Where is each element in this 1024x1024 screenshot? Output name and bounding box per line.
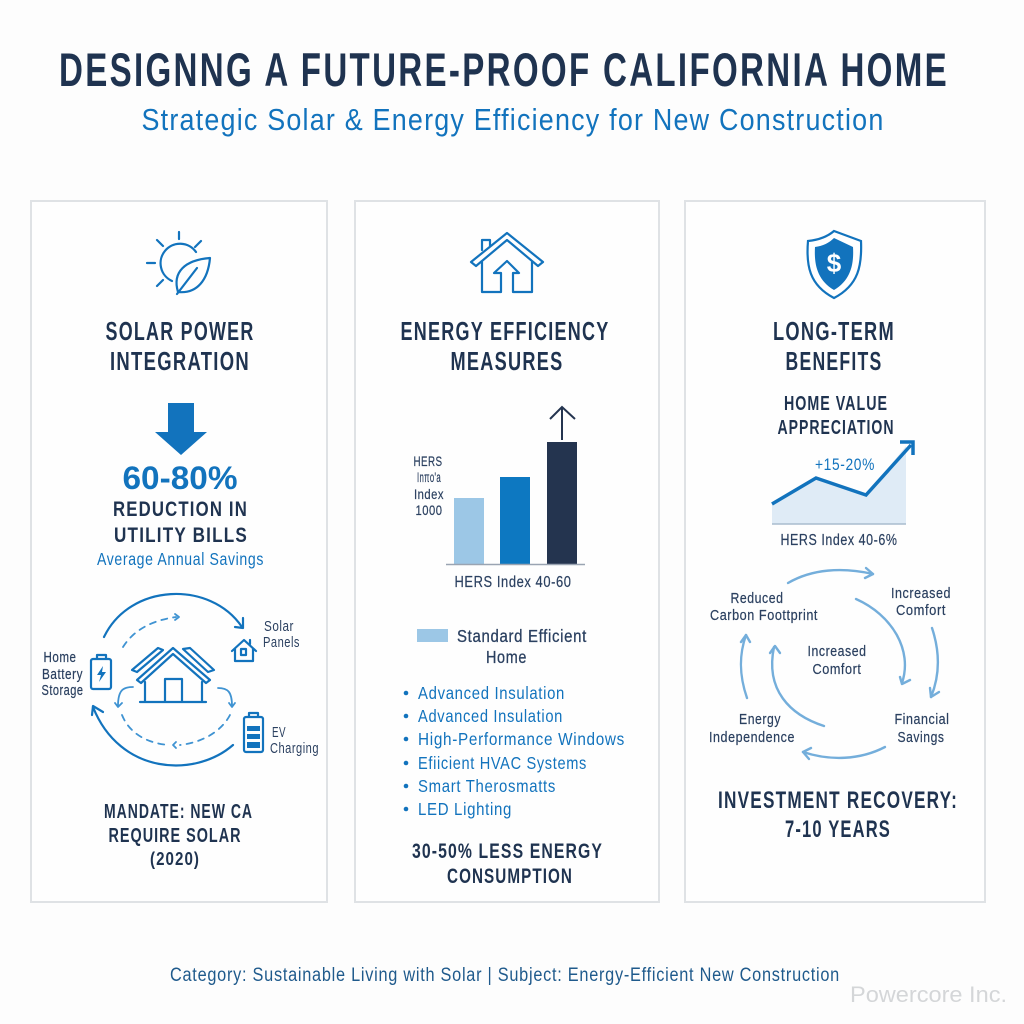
label: home battery storage: Storage: [42, 683, 84, 699]
panel: energy efficiency measures: [355, 201, 659, 902]
label: energy independence: [709, 711, 795, 746]
chart: value appreciation: [772, 442, 913, 524]
list: measures: Advanced Insulation: [418, 706, 563, 726]
text: average annual savings: Average Annual Savings: [97, 549, 264, 569]
heading: solar power integration: [106, 318, 254, 376]
stat: 60-80%: 60-80%: [122, 460, 238, 496]
label: EV charging: EV: [272, 725, 286, 741]
footer: Category: Sustainable Living with Solar | Subject: Energy-Efficient New Construction: [170, 965, 840, 986]
heading: long-term benefits: [773, 318, 895, 376]
label: energy independence: Independence: [709, 729, 795, 746]
icon: shield with dollar: $: [827, 248, 842, 278]
label: increased comfort (right): Comfort: [896, 602, 946, 619]
text: reduction in utility bills: [113, 498, 248, 547]
label: financial savings: Financial: [894, 711, 950, 728]
label: energy independence: Energy: [739, 711, 781, 728]
subheading: home value appreciation: HOME VALUE: [784, 393, 888, 415]
chart: HERS bars: [414, 407, 585, 591]
label: increased comfort (center): [808, 643, 866, 678]
label: reduced carbon footprint: Carbon Foottprint: [710, 607, 818, 624]
list: measures: LED Lighting: [418, 799, 512, 819]
heading: solar power integration: SOLAR POWER: [106, 318, 254, 346]
label: EV charging: Charging: [270, 741, 319, 757]
label: home battery storage: [42, 650, 84, 699]
list: measures: [404, 683, 625, 819]
text: mandate: MANDATE: NEW CA: [104, 801, 253, 823]
text: less energy consumption: CONSUMPTION: [447, 865, 573, 888]
label: home battery storage: Home: [44, 650, 76, 666]
text: mandate: REQUIRE SOLAR: [108, 825, 242, 847]
text: reduction in utility bills: UTILITY BILLS: [114, 524, 248, 547]
bar: light: [454, 498, 484, 564]
list: measures: Advanced Insulation: [418, 683, 565, 703]
arrows: outer and inner cycle: [741, 568, 939, 759]
label: +15-20%: +15-20%: [815, 455, 875, 474]
icon: sun and leaf: [147, 232, 210, 294]
axis label: Index: [414, 486, 444, 502]
list: measures: Efiicient HVAC Systems: [418, 753, 587, 773]
label: solar panels: Panels: [263, 635, 300, 651]
heading: solar power integration: INTEGRATION: [110, 348, 250, 376]
heading: long-term benefits: BENEFITS: [786, 348, 882, 376]
text: mandate: [104, 801, 253, 869]
icon: down arrow: [155, 403, 207, 455]
text: less energy consumption: 30-50% LESS ENERGY: [412, 840, 603, 863]
label: increased comfort (right): [891, 585, 951, 619]
icon: house: [471, 233, 543, 292]
icon: small house: [232, 640, 256, 661]
bar: medium: [500, 477, 530, 564]
axis label: HERS: [414, 453, 442, 469]
icon: house with solar roof: [132, 648, 214, 702]
panel: long-term benefits: [685, 201, 985, 902]
label: increased comfort (right): Increased: [891, 585, 951, 602]
legend: standard efficient home: [417, 626, 587, 667]
label: increased comfort (center): Increased: [808, 643, 866, 660]
subheading: home value appreciation: APPRECIATION: [778, 417, 894, 439]
bar: dark: [547, 442, 577, 564]
heading: long-term benefits: LONG-TERM: [773, 318, 895, 346]
arrow: up: [550, 407, 575, 440]
axis label: 1000: [416, 502, 442, 518]
arrows: energy loop: [92, 594, 243, 765]
label: financial savings: [894, 711, 950, 746]
diagram: home energy cycle: [42, 594, 319, 765]
text: reduction in utility bills: REDUCTION IN: [113, 498, 248, 521]
legend: standard efficient home: Home: [486, 647, 527, 667]
heading: energy efficiency measures: MEASURES: [450, 348, 564, 376]
legend: standard efficient home: Standard Efficient: [457, 626, 587, 646]
icon: battery: [91, 655, 111, 689]
label: reduced carbon footprint: [710, 590, 818, 624]
text: mandate: (2020): [150, 849, 200, 869]
text: less energy consumption: [412, 840, 603, 888]
label: solar panels: [263, 619, 300, 651]
list: measures: Smart Therosmatts: [418, 776, 556, 796]
label: solar panels: Solar: [264, 619, 294, 635]
chart caption: HERS Index 40-6%: [780, 532, 898, 549]
panel: solar power integration: [31, 201, 327, 902]
subtitle: Strategic Solar & Energy Efficiency for New Construction: [142, 102, 884, 137]
list: measures: High-Performance Windows: [418, 729, 625, 749]
label: home battery storage: Battery: [42, 667, 83, 683]
watermark: Powercore Inc.: [850, 982, 1007, 1007]
chart caption: HERS Index 40-60: [454, 574, 572, 591]
label: reduced carbon footprint: Reduced: [730, 590, 784, 607]
label: financial savings: Savings: [898, 729, 944, 746]
heading: energy efficiency measures: ENERGY EFFICIENCY: [400, 318, 610, 346]
text: investment recovery: [718, 787, 958, 843]
icon: EV battery: [244, 713, 263, 752]
icon: shield with dollar: [807, 231, 861, 298]
label: increased comfort (center): Comfort: [812, 661, 862, 678]
label: EV charging: [270, 725, 319, 757]
diagram: benefits cycle: [709, 568, 951, 759]
axis label: [414, 453, 444, 518]
heading: energy efficiency measures: [400, 318, 610, 376]
text: investment recovery: 7-10 YEARS: [785, 816, 891, 843]
subheading: home value appreciation: [778, 393, 894, 439]
axis label: Inπo'a: [417, 470, 441, 485]
